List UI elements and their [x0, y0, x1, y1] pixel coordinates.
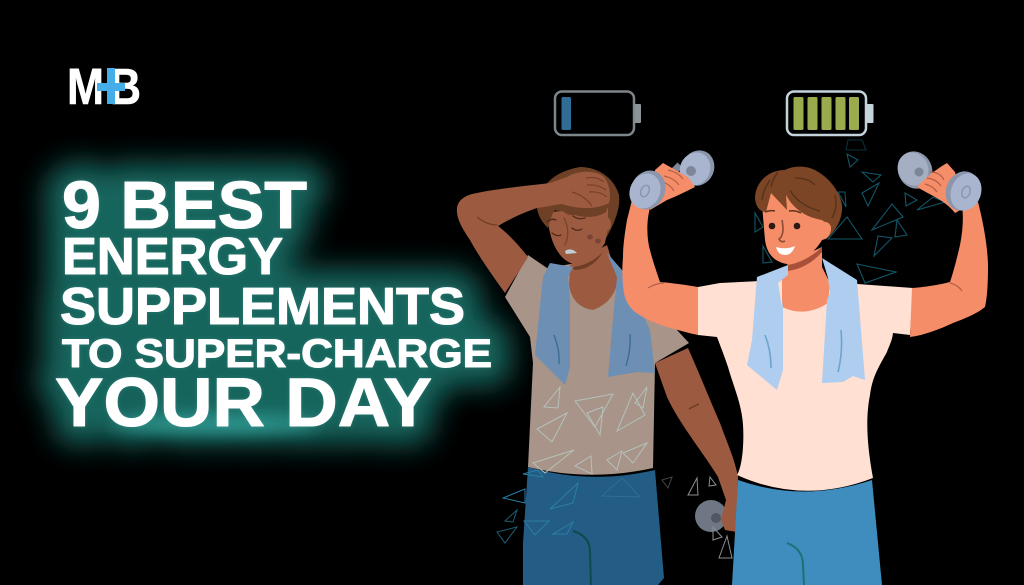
shirt: [505, 255, 689, 475]
raised arm: [457, 172, 610, 293]
eyes and nose: [765, 211, 801, 242]
towel right: [607, 253, 655, 377]
headline glow: TO SUPER-CHARGE: [62, 332, 492, 376]
ear: [821, 222, 831, 240]
icon: low battery: [555, 92, 641, 135]
towel left: [747, 265, 788, 390]
headline glow: TO SUPER-CHARGE: [62, 332, 492, 376]
logo: M+B: M: [67, 58, 104, 115]
face details: [547, 216, 585, 245]
energy particles behind energetic man: [755, 140, 945, 283]
headline glow: YOUR DAY: [55, 364, 432, 441]
dissolving particles on pants: [497, 470, 640, 543]
hair back: [537, 167, 619, 240]
logo: M+B: [67, 58, 141, 115]
fringe: [537, 195, 612, 228]
grey particles: [662, 477, 732, 558]
dissolving particles on shirt: [533, 387, 647, 474]
towel right: [822, 258, 865, 383]
pants: [523, 467, 664, 585]
headline glow: [55, 168, 492, 441]
hair strands: [762, 172, 836, 218]
icon: right dumbbell: [892, 146, 987, 216]
chin shadow: [788, 247, 822, 271]
mouth: [565, 249, 577, 254]
headline glow: ENERGY: [62, 228, 283, 286]
neck and chest: [569, 245, 617, 310]
face: [762, 188, 830, 264]
lower arm and hand: [655, 348, 738, 532]
viewer-left arm: [622, 200, 698, 335]
hair: [755, 167, 842, 240]
icon: left dumbbell: [624, 145, 720, 215]
figure: tired man: [457, 167, 738, 585]
smile: [776, 246, 795, 255]
shirt: [698, 280, 913, 491]
headline glow: 9 BEST: [62, 168, 307, 243]
neck and chest: [782, 247, 830, 312]
headline glow: YOUR DAY: [55, 364, 432, 441]
title: TO SUPER-CHARGE: [62, 332, 492, 376]
ear: [601, 217, 611, 231]
headline glow: ENERGY: [62, 228, 283, 286]
headline glow: SUPPLEMENTS: [60, 278, 465, 336]
chin shadow: [573, 252, 603, 270]
logo: M+B: B: [110, 58, 141, 115]
viewer-right arm: [910, 202, 988, 337]
headline glow: 9 BEST: [62, 168, 307, 243]
pants: [732, 480, 882, 585]
faded dumbbell: [695, 500, 727, 532]
title: 9 BEST: [62, 168, 307, 243]
headline glow: SUPPLEMENTS: [60, 278, 465, 336]
title: YOUR DAY: [55, 364, 432, 441]
title: ENERGY: [62, 228, 283, 286]
figure: energetic man: [622, 167, 988, 585]
face: [547, 208, 608, 264]
title: SUPPLEMENTS: [60, 278, 465, 336]
title: [55, 168, 492, 441]
icon: full battery: [787, 92, 874, 135]
towel left: [535, 263, 573, 385]
